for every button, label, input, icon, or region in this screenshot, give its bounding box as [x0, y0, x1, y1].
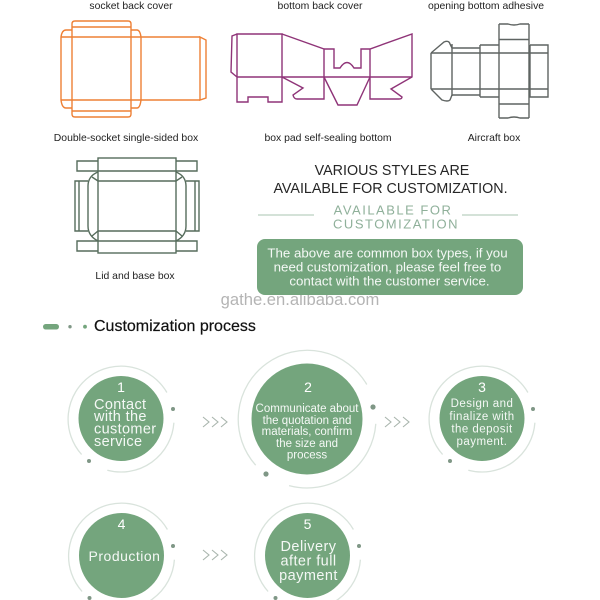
- step 3: Design and: [451, 398, 513, 410]
- caption: double-socket single-sided box: Double-socket single-sided box: [54, 133, 199, 144]
- step 2: the size and: [276, 438, 338, 450]
- step 2: the quotation and: [263, 415, 351, 427]
- step 3: finalize with: [449, 411, 515, 423]
- subheading: available for customization: [258, 202, 518, 232]
- step 1: with the: [93, 409, 147, 425]
- diagram: aircraft box: [431, 24, 548, 118]
- step 2: process: [287, 450, 327, 462]
- step 3: payment.: [457, 436, 507, 448]
- caption: opening bottom adhesive: opening bottom adhesive: [428, 1, 544, 12]
- caption: aircraft box: Aircraft box: [468, 133, 521, 144]
- step 2: 2: [304, 379, 312, 395]
- arrow: step 4 to 5: [203, 550, 227, 560]
- step 2: [238, 350, 376, 488]
- callout: customization notice: [257, 239, 523, 295]
- step 5: 5: [304, 516, 312, 532]
- step 5: payment: [279, 568, 338, 584]
- caption: socket back cover: socket back cover: [89, 1, 173, 12]
- step 1: 1: [117, 379, 125, 395]
- diagram: double-socket single-sided box: [61, 21, 206, 117]
- heading: various styles: AVAILABLE FOR CUSTOMIZATION.: [273, 181, 508, 197]
- step 4: [69, 503, 175, 600]
- subheading: available for customization: AVAILABLE FOR: [334, 202, 452, 218]
- step 3: [429, 366, 535, 472]
- step 4: Production: [89, 548, 160, 564]
- arrow: step 1 to 2: [203, 417, 227, 427]
- step 2: materials, confirm: [262, 426, 352, 438]
- step 5: [255, 503, 361, 600]
- step 5: after full: [280, 554, 337, 570]
- step 2: Communicate about: [256, 403, 359, 415]
- caption: lid and base box: Lid and base box: [95, 271, 175, 282]
- step 1: [68, 366, 175, 472]
- section heading: customization process: Customization process: [94, 318, 256, 335]
- step 4: 4: [118, 516, 126, 532]
- step 1: Contact: [94, 397, 146, 413]
- callout: customization notice: The above are common box types, if you: [267, 246, 508, 260]
- step 3: 3: [478, 379, 486, 395]
- step 5: Delivery: [281, 539, 337, 555]
- arrow: step 2 to 3: [385, 417, 409, 427]
- caption: box pad self-sealing bottom: box pad self-sealing bottom: [264, 133, 392, 144]
- caption: bottom back cover: bottom back cover: [278, 1, 363, 12]
- diagram: box pad self-sealing bottom: [231, 34, 412, 105]
- callout: customization notice: contact with the customer service.: [289, 274, 490, 288]
- step 3: the deposit: [451, 424, 513, 436]
- watermark: gathe.en.alibaba.com: [221, 290, 379, 309]
- step 1: service: [94, 434, 142, 450]
- step 1: customer: [94, 422, 156, 438]
- callout: customization notice: need customization, please feel free to: [274, 260, 501, 274]
- heading: various styles: VARIOUS STYLES ARE: [315, 163, 469, 179]
- subheading: available for customization: CUSTOMIZATION: [333, 216, 459, 232]
- diagram: lid and base box: [75, 158, 199, 253]
